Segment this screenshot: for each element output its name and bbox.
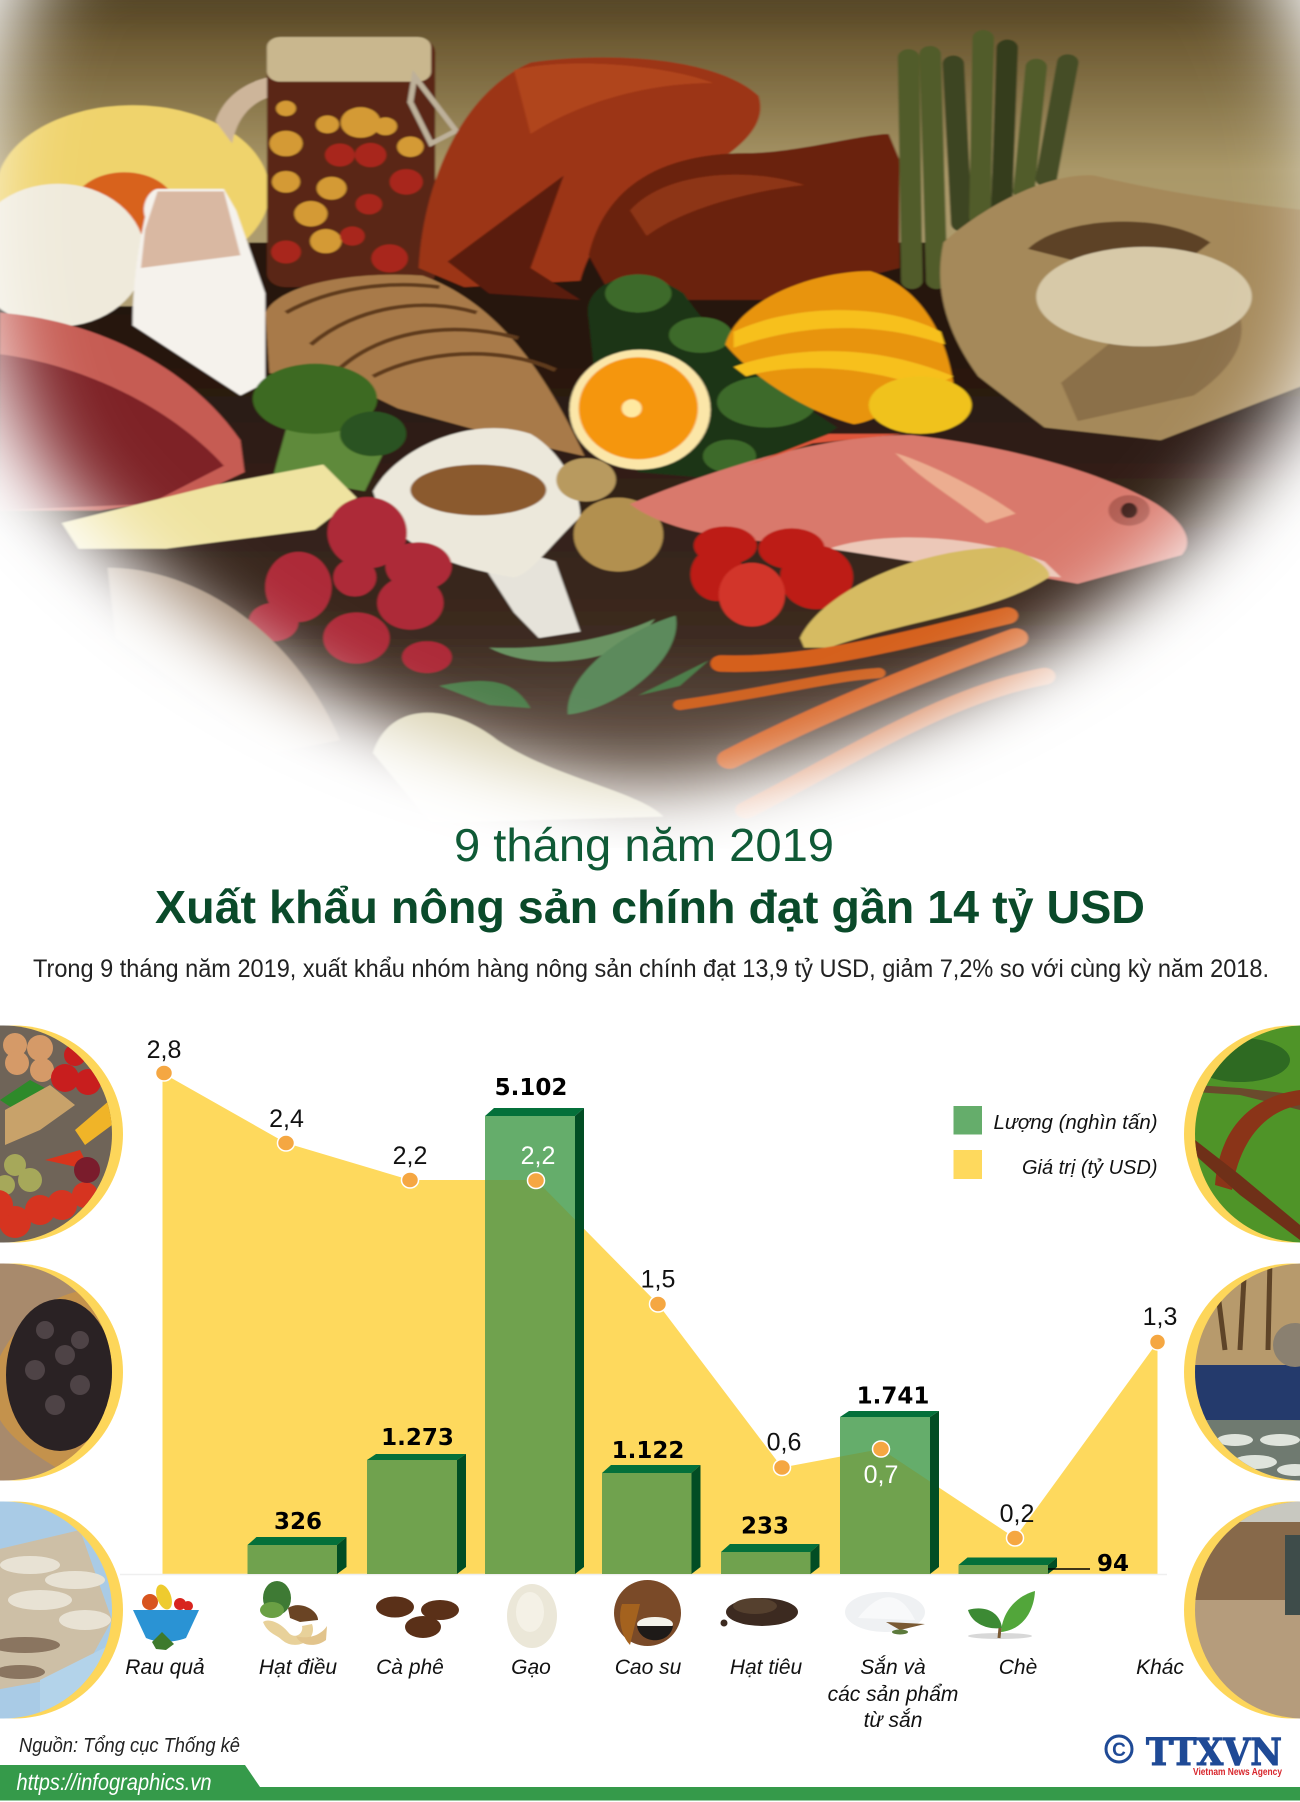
volume labels: 5.102 <box>495 1075 567 1101</box>
heading: main title: Xuất khẩu nông sản chính đạt gần 14 tỷ USD <box>155 881 1145 933</box>
value labels: 0,6 <box>767 1428 801 1456</box>
value labels: 2,4 <box>269 1105 304 1133</box>
icon: vegetable basket <box>133 1582 199 1650</box>
data points <box>156 1065 1166 1546</box>
icon: cassava starch <box>845 1592 925 1634</box>
category labels: Chè <box>999 1656 1037 1679</box>
volume labels <box>274 1075 1129 1577</box>
legend: Lượng (nghìn tấn) <box>994 1112 1158 1134</box>
category labels: Sắn và <box>860 1656 926 1679</box>
icon: rice <box>507 1584 557 1648</box>
icon: tea leaves <box>968 1591 1035 1639</box>
legend <box>954 1106 1158 1179</box>
value labels: 1,5 <box>641 1266 675 1294</box>
photo circle: cassava <box>1184 1500 1300 1730</box>
volume labels: 1.273 <box>381 1425 454 1451</box>
photo circle: tea <box>1184 1020 1300 1250</box>
category labels: từ sắn <box>864 1709 922 1732</box>
value labels: 2,8 <box>147 1036 181 1064</box>
heading: period: 9 tháng năm 2019 <box>454 819 834 871</box>
volume labels: 1.741 <box>857 1384 929 1410</box>
footer bar with url <box>0 1765 1300 1800</box>
volume labels: 326 <box>274 1509 322 1535</box>
chart: export value and volume <box>120 1036 1177 1577</box>
legend: Giá trị (tỷ USD) <box>1022 1157 1158 1179</box>
category labels: các sản phẩm <box>828 1683 958 1706</box>
category labels <box>125 1656 1184 1732</box>
photo circle: rice bags <box>0 1500 123 1730</box>
category labels: Gạo <box>511 1656 551 1679</box>
area: value (billion USD) <box>162 1073 1158 1574</box>
volume labels: 233 <box>741 1514 789 1540</box>
icon: rubber latex bowl <box>614 1580 681 1646</box>
value labels: 0,2 <box>1000 1500 1034 1528</box>
value labels: 0,7 <box>864 1461 898 1489</box>
logo: TTXVN: TTXVN <box>1146 1730 1282 1774</box>
category labels: Hạt tiêu <box>730 1656 803 1679</box>
volume labels: 1.122 <box>612 1438 684 1464</box>
logo: TTXVN <box>1106 1730 1282 1778</box>
photo circle: rubber workers <box>1184 1260 1300 1490</box>
bars: volume (thousand tons) <box>248 1108 1057 1574</box>
food photo banner <box>0 0 1300 849</box>
value labels: 2,2 <box>521 1142 555 1170</box>
category labels: Cao su <box>615 1656 682 1679</box>
category labels: Rau quả <box>125 1656 205 1679</box>
icon: cashew <box>260 1581 327 1645</box>
footer bar with url: https://infographics.vn <box>16 1769 212 1795</box>
baseline <box>120 1574 1167 1576</box>
category labels: Khác <box>1136 1656 1184 1679</box>
value labels <box>147 1036 1177 1528</box>
category labels: Hạt điều <box>259 1656 337 1679</box>
icon: coffee beans <box>376 1596 459 1638</box>
category labels: Cà phê <box>376 1656 444 1679</box>
photo circle: fruit and vegetables <box>0 1020 123 1250</box>
logo: TTXVN: C <box>1112 1740 1126 1761</box>
volume labels: 94 <box>1097 1551 1129 1577</box>
value labels: 2,2 <box>393 1142 427 1170</box>
value labels: 1,3 <box>1143 1303 1177 1331</box>
icon: black pepper <box>720 1598 798 1626</box>
source note: Nguồn: Tổng cục Thống kê <box>19 1735 240 1757</box>
photo circle: pepper <box>0 1260 123 1490</box>
